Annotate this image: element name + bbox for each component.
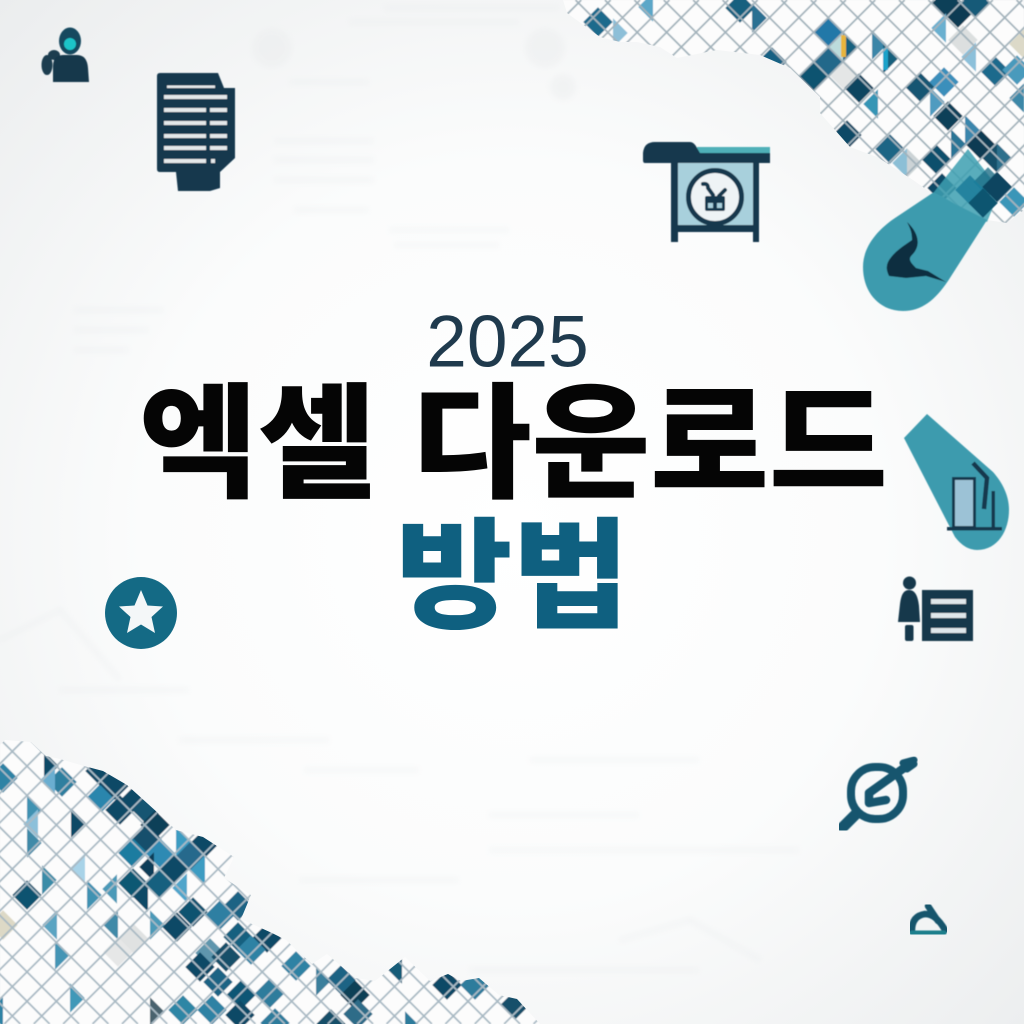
- icon: person beside list: [898, 576, 973, 641]
- title: method: 방법: [396, 510, 629, 644]
- faint background sketches: [0, 8, 800, 970]
- icon: teal drop with building: [904, 414, 1009, 550]
- icon: signboard with emblem: [643, 142, 770, 242]
- icon: person with cyan face: [42, 28, 89, 82]
- title: Excel download: 엑셀 다운로드: [139, 374, 888, 514]
- icon: star badge: [105, 577, 177, 649]
- mosaic: top right: [564, 0, 1024, 223]
- icon: rounded square arrow: [843, 760, 914, 827]
- icon: document list: [157, 73, 235, 191]
- year heading: 2025: [426, 302, 589, 382]
- icon: teal drop with swoosh: [863, 149, 1012, 311]
- mosaic: bottom left: [0, 740, 538, 1024]
- icon: small triangle: [912, 906, 945, 933]
